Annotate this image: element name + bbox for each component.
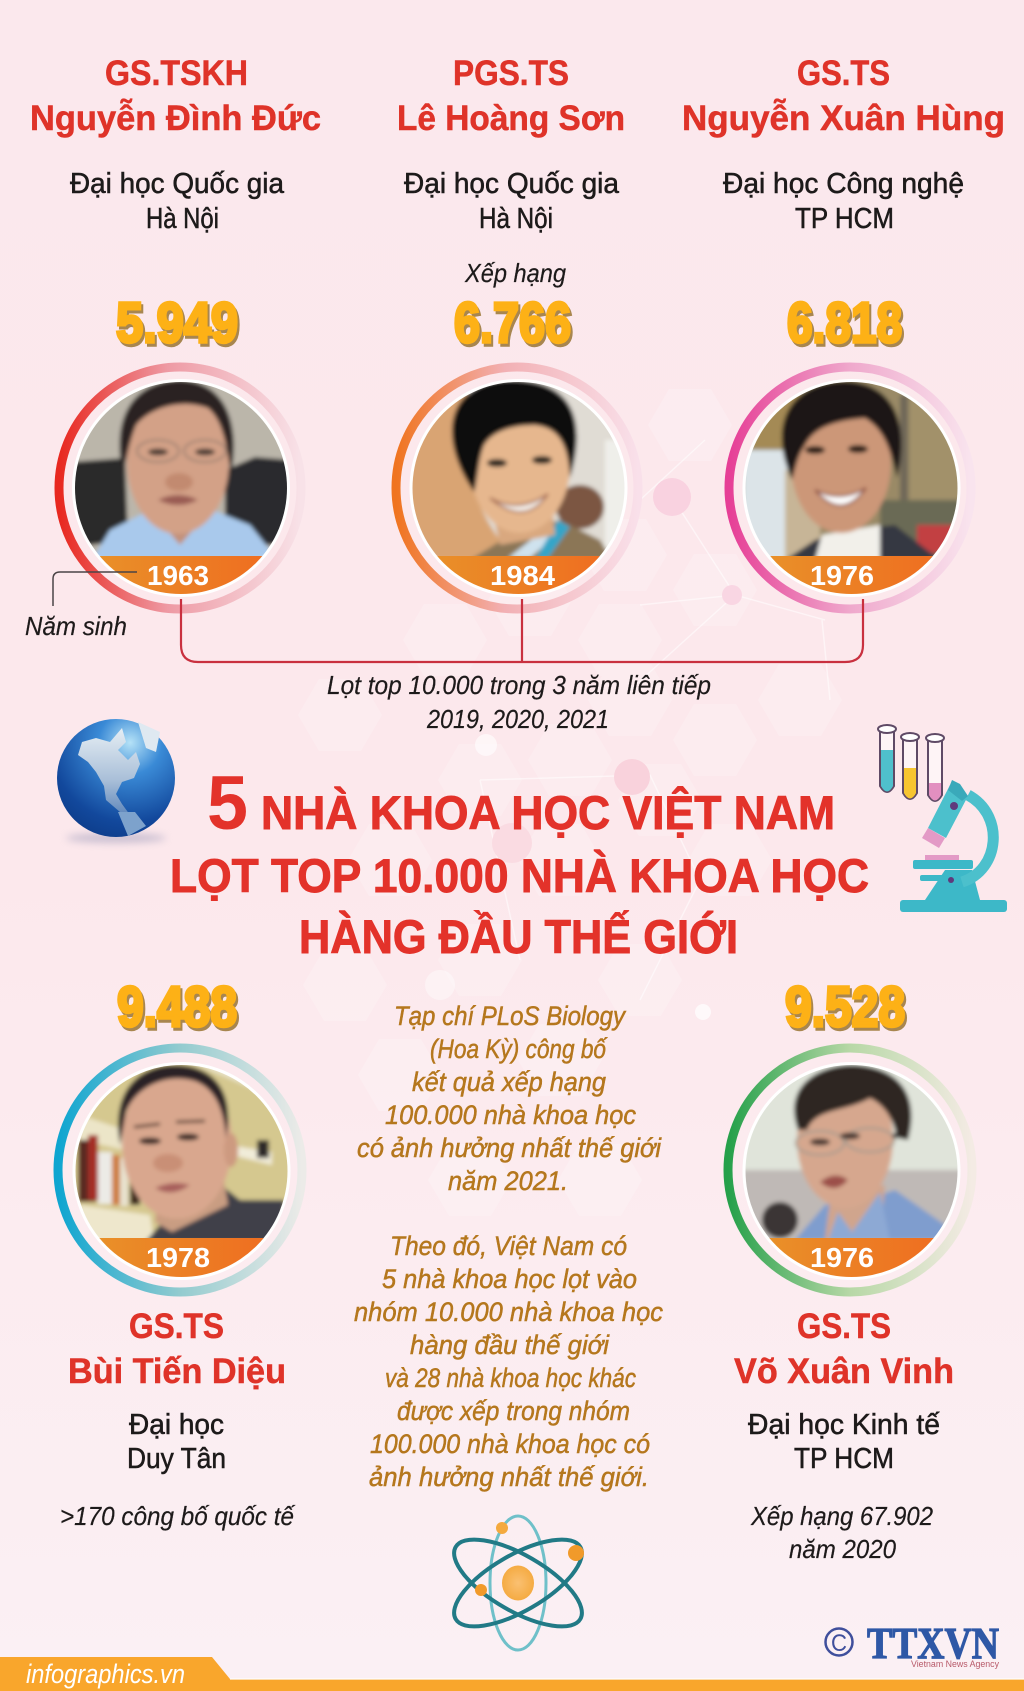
scientist 4 details: Bùi Tiến Diệu: Đại học xyxy=(129,1409,224,1441)
center description text: và 28 nhà khoa học khác xyxy=(385,1363,636,1393)
icon: globe xyxy=(57,719,175,843)
birth year band xyxy=(770,1238,934,1277)
title: HÀNG ĐẦU THẾ GIỚI xyxy=(299,910,738,963)
portrait 5: 1976 xyxy=(728,1048,972,1292)
scientist 3 header: Nguyễn Xuân Hùng: Nguyễn Xuân Hùng xyxy=(682,98,1005,138)
birth year band xyxy=(100,1238,264,1277)
title: NHÀ KHOA HỌC VIỆT NAM xyxy=(261,786,835,839)
scientist 5 details: Võ Xuân Vinh: Võ Xuân Vinh xyxy=(734,1352,954,1391)
center description text: 100.000 nhà khoa học có xyxy=(370,1429,650,1459)
rank number 6.766: 6.766 xyxy=(456,294,573,358)
copyright logo TTXVN xyxy=(826,1619,999,1669)
text: top 10,000 for 3 consecutive years xyxy=(327,670,711,734)
scientist 5 details: Võ Xuân Vinh: Xếp hạng 67.902 xyxy=(750,1501,933,1531)
rank number 9.528: 9.528 xyxy=(785,975,905,1039)
scientist 1 header: Nguyễn Đình Đức: Nguyễn Đình Đức xyxy=(30,98,321,138)
center description text: có ảnh hưởng nhất thế giới xyxy=(357,1133,662,1163)
icon: atom xyxy=(442,1516,594,1650)
center description text: ảnh hưởng nhất thế giới. xyxy=(369,1462,649,1492)
scientist 3 header: Nguyễn Xuân Hùng: TP HCM xyxy=(795,203,894,235)
scientist 4 details: Bùi Tiến Diệu: GS.TS xyxy=(129,1307,224,1346)
center description text: (Hoa Kỳ) công bố xyxy=(430,1034,608,1064)
portrait 2: 1984 xyxy=(396,367,638,609)
copyright logo TTXVN: TTXVN xyxy=(867,1619,999,1668)
rank number 9.528: 9.528 xyxy=(787,978,907,1042)
center description text: kết quả xếp hạng xyxy=(412,1067,606,1097)
center description text xyxy=(354,1001,663,1492)
scientist 5 details: Võ Xuân Vinh: năm 2020 xyxy=(789,1534,896,1564)
center description text: nhóm 10.000 nhà khoa học xyxy=(354,1297,663,1327)
scientist 5 details: Võ Xuân Vinh xyxy=(734,1307,954,1564)
scientist 1 header: Nguyễn Đình Đức: Đại học Quốc gia xyxy=(70,168,285,200)
title: 5 xyxy=(207,761,248,846)
scientist 2 header: Lê Hoàng Sơn: Đại học Quốc gia xyxy=(404,168,620,200)
birth year band: 1976 xyxy=(810,560,874,591)
birth year band xyxy=(770,556,933,594)
rank number 5.949: 5.949 xyxy=(118,294,240,358)
scientist 3 header: Nguyễn Xuân Hùng: Đại học Công nghệ xyxy=(723,168,964,200)
scientist 5 details: Võ Xuân Vinh: GS.TS xyxy=(797,1307,891,1346)
callout: birth year label xyxy=(25,572,137,641)
scientist 2 header: Lê Hoàng Sơn: Lê Hoàng Sơn xyxy=(397,99,625,138)
portrait 4: 1978 xyxy=(58,1048,302,1292)
scientist 4 details: Bùi Tiến Diệu: Bùi Tiến Diệu xyxy=(68,1352,286,1391)
scientist 1 header: Nguyễn Đình Đức xyxy=(30,54,321,235)
scientist 3 header: Nguyễn Xuân Hùng: GS.TS xyxy=(797,54,890,93)
scientist 4 details: Bùi Tiến Diệu: >170 công bố quốc tế xyxy=(60,1501,295,1531)
birth year band xyxy=(437,556,600,594)
center description text: được xếp trong nhóm xyxy=(397,1396,630,1426)
rank number 5.949: 5.949 xyxy=(116,291,238,355)
center description text: Theo đó, Việt Nam có xyxy=(390,1231,627,1261)
rank number 9.488: 9.488 xyxy=(117,975,237,1039)
title xyxy=(170,761,869,963)
scientist 5 details: Võ Xuân Vinh: TP HCM xyxy=(794,1443,894,1475)
copyright logo TTXVN: C xyxy=(831,1630,847,1657)
scientist 3 header: Nguyễn Xuân Hùng xyxy=(682,54,1005,235)
portrait 1: 1963 xyxy=(59,367,301,609)
connector linking three scientists xyxy=(181,599,863,662)
rank number 6.766: 6.766 xyxy=(454,291,571,355)
text: top 10,000 for 3 consecutive years: Lọt top 10.000 trong 3 năm liên tiếp xyxy=(327,670,711,700)
birth year band: 1963 xyxy=(147,560,209,591)
title: LỌT TOP 10.000 NHÀ KHOA HỌC xyxy=(170,849,869,902)
birth year band: 1976 xyxy=(810,1242,874,1273)
birth year band: 1984 xyxy=(490,560,555,591)
icon: microscope xyxy=(900,780,1007,912)
scientist 2 header: Lê Hoàng Sơn: PGS.TS xyxy=(453,54,569,93)
scientist 5 details: Võ Xuân Vinh: Đại học Kinh tế xyxy=(748,1409,940,1441)
scientist 4 details: Bùi Tiến Diệu xyxy=(60,1307,295,1531)
center description text: hàng đầu thế giới xyxy=(410,1330,610,1360)
scientist 1 header: Nguyễn Đình Đức: Hà Nội xyxy=(146,203,219,235)
label: rank: Xếp hạng xyxy=(464,258,566,288)
rank number 9.488: 9.488 xyxy=(119,978,239,1042)
birth year band xyxy=(100,556,262,594)
text: top 10,000 for 3 consecutive years: 2019, 2020, 2021 xyxy=(426,704,609,734)
birth year band: 1978 xyxy=(146,1242,210,1273)
center description text: 5 nhà khoa học lọt vào xyxy=(382,1264,637,1294)
scientist 2 header: Lê Hoàng Sơn: Hà Nội xyxy=(479,203,553,235)
center description text: Tạp chí PLoS Biology xyxy=(394,1001,626,1031)
background hexagon and molecule pattern xyxy=(298,389,842,1216)
portrait 3: 1976 xyxy=(729,367,971,609)
rank number 6.818: 6.818 xyxy=(787,291,902,355)
footer bar xyxy=(0,1657,1024,1691)
center description text: năm 2021. xyxy=(448,1166,568,1196)
scientist 2 header: Lê Hoàng Sơn xyxy=(397,54,625,235)
callout: birth year label: Năm sinh xyxy=(25,611,127,641)
rank number 6.818: 6.818 xyxy=(789,294,904,358)
icon: test tubes xyxy=(878,725,944,801)
scientist 4 details: Bùi Tiến Diệu: Duy Tân xyxy=(127,1443,226,1475)
copyright logo TTXVN: Vietnam News Agency xyxy=(911,1659,999,1669)
footer bar: infographics.vn xyxy=(26,1659,185,1689)
scientist 1 header: Nguyễn Đình Đức: GS.TSKH xyxy=(105,54,248,93)
center description text: 100.000 nhà khoa học xyxy=(385,1100,636,1130)
